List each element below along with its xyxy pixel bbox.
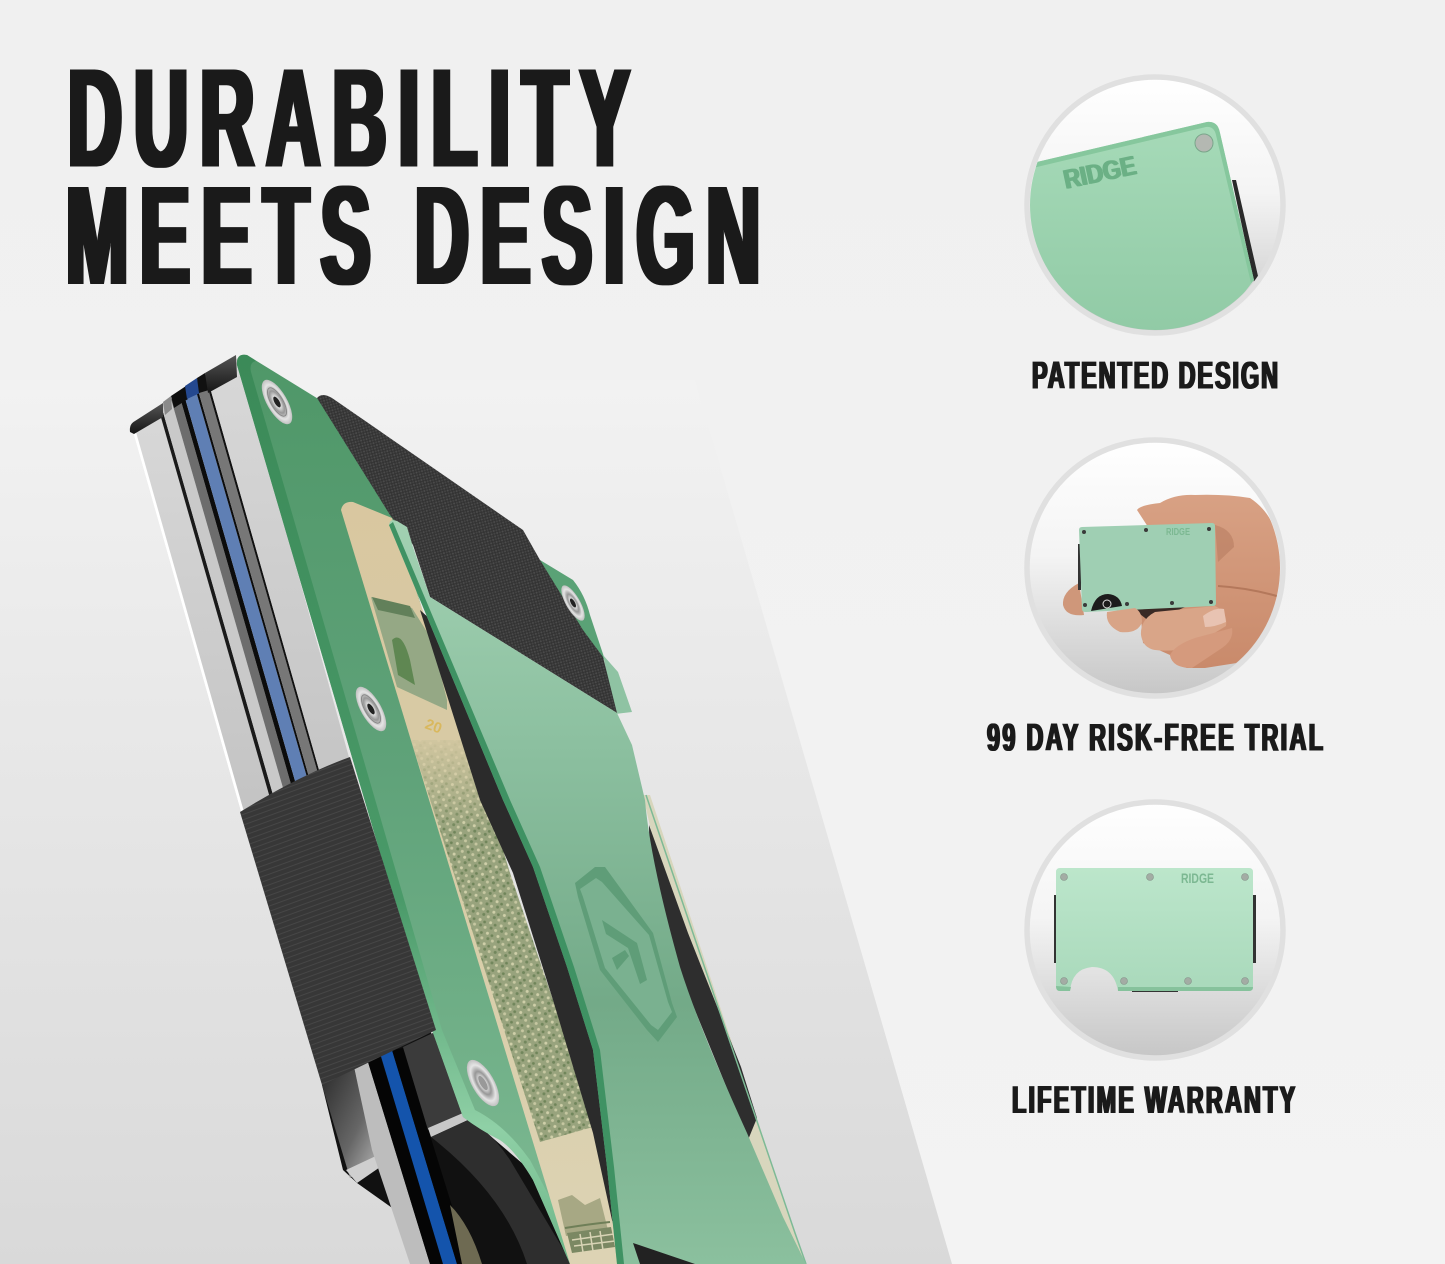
icon: hand holding wallet (1063, 495, 1285, 668)
card stack (130, 355, 372, 840)
screw right (557, 582, 589, 624)
feature: risk-free trial (987, 440, 1323, 759)
feature: patented design (1020, 77, 1283, 397)
cream edge of bills behind clip (643, 795, 806, 1264)
screw lower (460, 1055, 506, 1111)
folded banknote (341, 502, 640, 1264)
label: LIFETIME WARRANTY (1012, 1078, 1295, 1121)
badge circle (1027, 77, 1283, 333)
feature: lifetime warranty (1012, 802, 1295, 1121)
icon: wallet front view (1054, 868, 1256, 992)
dark inner strip (649, 825, 757, 1140)
card top edges (130, 355, 237, 434)
banknote series number: 20 (423, 716, 444, 737)
fabric pocket behind clip (420, 610, 700, 1264)
wallet illustration (130, 355, 806, 1264)
icon: green wallet corner (1030, 122, 1258, 330)
green back plate (237, 355, 610, 1264)
label: PATENTED DESIGN (1032, 353, 1278, 397)
elastic band (240, 757, 436, 1085)
hexagon logo emboss (575, 867, 677, 1042)
RIDGE engraved logo: RIDGE (1061, 150, 1139, 195)
title (66, 39, 760, 314)
badge circle (1027, 802, 1283, 1058)
label: 99 DAY RISK-FREE TRIAL (987, 715, 1323, 759)
back plate upper right piece (540, 560, 632, 714)
front money clip (389, 520, 806, 1264)
lower metal and cut-out (322, 1030, 640, 1264)
black elastic strap (317, 395, 617, 713)
title: DURABILITY (68, 39, 630, 196)
background diagonal panel (0, 380, 952, 1264)
RIDGE small logo: RIDGE (1166, 527, 1190, 538)
screw top (256, 375, 298, 429)
clip outer highlight (646, 795, 806, 1264)
title: MEETS DESIGN (66, 157, 760, 314)
clip bottom notch (633, 1243, 695, 1264)
screw middle (350, 682, 392, 736)
plate bevel edge (237, 355, 585, 1264)
badge circle (1027, 440, 1283, 696)
banknote lower engraving (558, 1195, 615, 1253)
RIDGE logo: RIDGE (1181, 870, 1214, 886)
